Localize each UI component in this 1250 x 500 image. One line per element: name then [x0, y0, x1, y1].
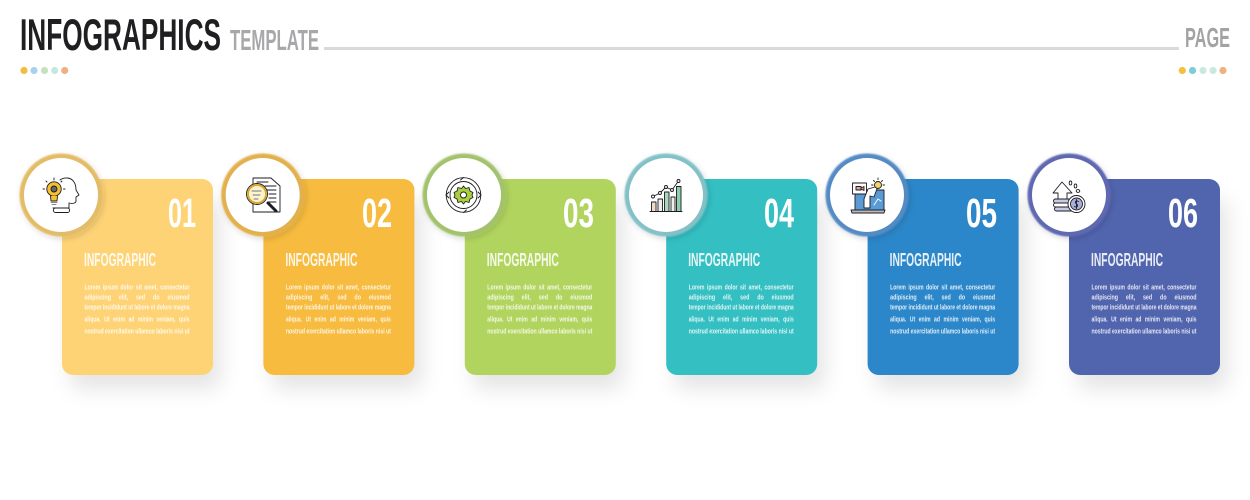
left dots [20, 67, 68, 74]
body text: nostrud exercitation ullamco laboris nisi ut [487, 326, 593, 336]
body text [689, 282, 794, 336]
body text: adipiscing elit, sed do eiusmod [84, 292, 190, 302]
body text [890, 282, 996, 336]
number: 03 [563, 190, 594, 236]
card [666, 179, 817, 375]
number: 02 [362, 190, 392, 236]
body text: nostrud exercitation ullamco laboris nisi ut [890, 326, 995, 336]
panel: step 03 [422, 154, 624, 389]
icon badge [20, 154, 102, 236]
body text: aliqua. Ut enim ad minim veniam, quis [890, 314, 995, 324]
title: INFOGRAPHICS [20, 11, 221, 60]
body text [487, 282, 593, 336]
number: 04 [764, 190, 794, 236]
body text [1092, 282, 1197, 336]
body text: Lorem ipsum dolor sit amet, consectetur [286, 282, 391, 292]
body text [286, 282, 391, 336]
body text: adipiscing elit, sed do eiusmod [890, 292, 995, 302]
body text: nostrud exercitation ullamco laboris nisi ut [1092, 326, 1197, 336]
heading: INFOGRAPHIC [487, 250, 559, 270]
heading: INFOGRAPHIC [1091, 250, 1163, 270]
icon badge [221, 154, 304, 236]
body text: tempor incididunt ut labore et dolore magna [689, 302, 794, 312]
body text: tempor incididunt ut labore et dolore magna [487, 302, 593, 312]
heading: INFOGRAPHIC [84, 250, 156, 270]
card [465, 179, 616, 375]
header [20, 11, 1230, 74]
body text: adipiscing elit, sed do eiusmod [689, 292, 794, 302]
body text: nostrud exercitation ullamco laboris nisi ut [84, 326, 190, 336]
icon: document magnifier [246, 178, 280, 212]
body text: tempor incididunt ut labore et dolore magna [1092, 302, 1197, 312]
body text: Lorem ipsum dolor sit amet, consectetur [487, 282, 592, 292]
body text: tempor incididunt ut labore et dolore magna [84, 302, 190, 312]
body text: adipiscing elit, sed do eiusmod [487, 292, 593, 302]
card [62, 179, 213, 375]
body text: nostrud exercitation ullamco laboris nisi ut [689, 326, 794, 336]
body text: aliqua. Ut enim ad minim veniam, quis [1092, 314, 1196, 324]
number: 06 [1168, 190, 1198, 236]
body text: aliqua. Ut enim ad minim veniam, quis [84, 314, 190, 324]
body text: Lorem ipsum dolor sit amet, consectetur [1092, 282, 1197, 292]
body text: tempor incididunt ut labore et dolore magna [286, 302, 391, 312]
panel: step 05 [826, 154, 1027, 389]
panel: step 06 [1028, 154, 1228, 389]
right dots [1179, 67, 1227, 74]
body text: tempor incididunt ut labore et dolore magna [890, 302, 996, 312]
icon: coins and up arrow [1053, 181, 1085, 212]
icon: growth bar chart [650, 180, 682, 212]
heading: INFOGRAPHIC [890, 250, 962, 270]
body text: Lorem ipsum dolor sit amet, consectetur [84, 282, 190, 292]
card [868, 179, 1019, 375]
heading: INFOGRAPHIC [688, 250, 760, 270]
card [263, 179, 414, 375]
heading: INFOGRAPHIC [285, 250, 357, 270]
icon: laptop presentation [851, 178, 885, 213]
number: 01 [168, 190, 196, 236]
panel: step 01 [20, 154, 221, 389]
icon: lightbulb head [43, 178, 79, 212]
header rule [324, 47, 1179, 50]
panel: step 04 [624, 154, 825, 389]
body text: aliqua. Ut enim ad minim veniam, quis [689, 314, 794, 324]
subtitle: TEMPLATE [230, 25, 319, 57]
icon: gear with cycle arrows [446, 178, 481, 212]
body text: nostrud exercitation ullamco laboris nisi ut [286, 326, 391, 336]
body text: adipiscing elit, sed do eiusmod [286, 292, 391, 302]
body text: Lorem ipsum dolor sit amet, consectetur [689, 282, 794, 292]
body text: aliqua. Ut enim ad minim veniam, quis [286, 314, 391, 324]
panel: step 02 [221, 154, 422, 389]
icon badge [422, 154, 506, 236]
body text: aliqua. Ut enim ad minim veniam, quis [487, 314, 592, 324]
card [1069, 179, 1220, 375]
number: 05 [966, 190, 997, 236]
icon badge [826, 154, 908, 236]
body text: adipiscing elit, sed do eiusmod [1092, 292, 1197, 302]
icon badge [624, 154, 708, 236]
icon badge [1028, 154, 1110, 236]
body text: Lorem ipsum dolor sit amet, consectetur [890, 282, 995, 292]
body text [84, 282, 190, 336]
